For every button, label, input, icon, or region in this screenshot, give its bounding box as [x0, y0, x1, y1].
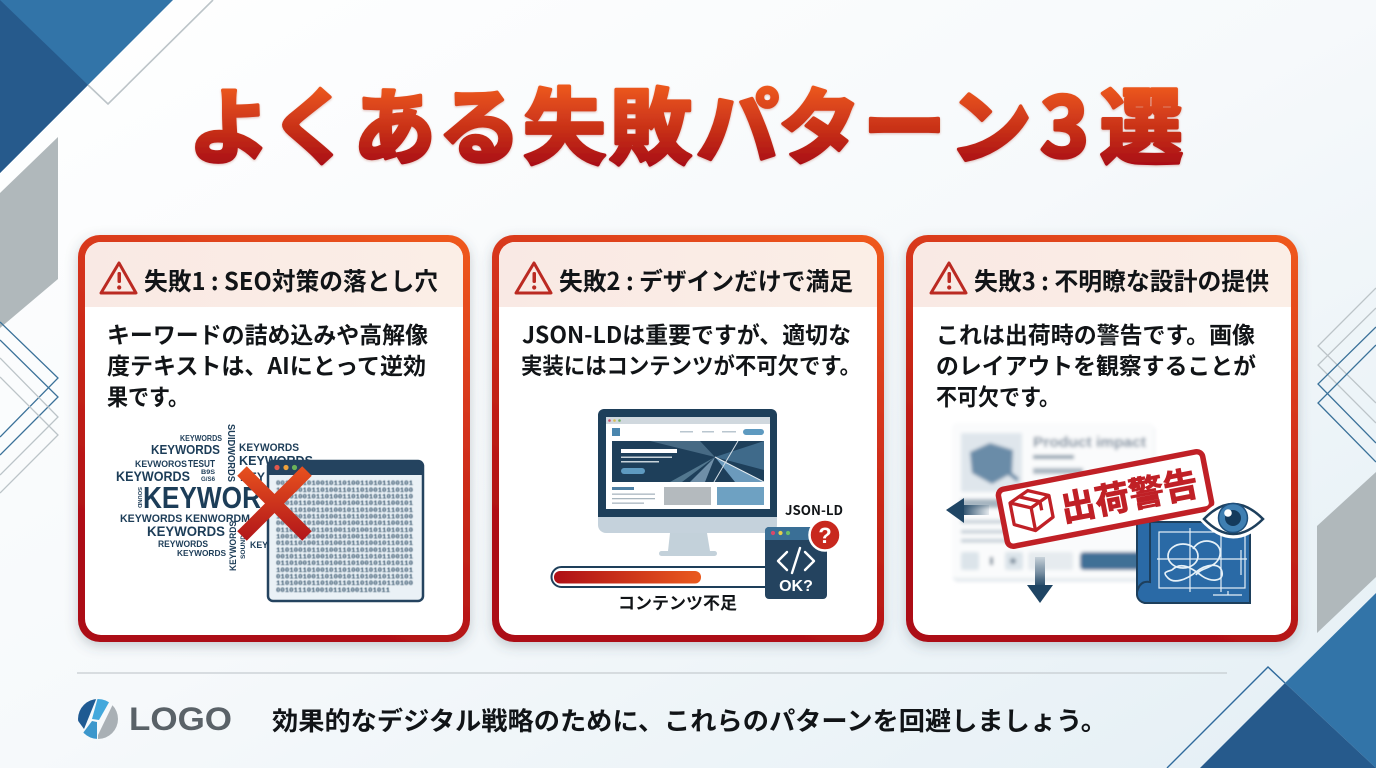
illustration: text-heavy browser window: 1101001011010011011010010110100	[276, 487, 413, 494]
illustration: keyword cloud: KEYWORDS	[239, 442, 299, 454]
illustration: text-heavy browser window: 0010111010010110100110101100101	[276, 554, 413, 560]
heading 1: 失敗1 : SEO対策の落とし穴	[144, 263, 438, 298]
panel: failure 2	[492, 235, 884, 642]
illustration: keyword cloud: KEYWORDS	[147, 524, 225, 539]
illustration: keyword cloud: SOUND	[136, 487, 142, 508]
body text 3	[936, 316, 1256, 412]
illustration: keyword cloud: KEYWORDS	[228, 521, 238, 571]
body text 2	[521, 316, 861, 381]
illustration: keyword cloud: KEYWORDS	[151, 442, 220, 457]
card frame 3	[906, 235, 1298, 642]
illustration: keyword cloud: KEYWOR	[143, 481, 261, 515]
title: よくある失敗パターン3選	[188, 61, 1183, 181]
illustration: keyword cloud: SOUND	[241, 534, 247, 559]
body text 3: のレイアウトを観察することが	[936, 347, 1256, 381]
illustration: text-heavy browser window: 1001011010010110100110101100101	[276, 534, 413, 540]
illustration: keyword cloud: KEYWORDS	[116, 468, 190, 484]
body text 2: 実装にはコンテンツが不可欠です。	[521, 349, 861, 381]
logo wordmark: LOGO	[129, 701, 232, 737]
heading 2: 失敗2 : デザインだけで満足	[559, 263, 853, 298]
label: JSON-LD: JSON-LD	[785, 499, 843, 519]
icon: warning triangle 2	[516, 263, 551, 293]
illustration: text-heavy browser window: 1101001011010011011010010110100	[276, 580, 413, 587]
illustration: text-heavy browser window: 1001011010010110100110101100101	[276, 500, 413, 507]
illustration: text-heavy browser window: 1101001011010011011010010110100	[276, 514, 413, 520]
illustration: keyword cloud: KEYWORDS	[177, 548, 226, 558]
body text 3: これは出荷時の警告です。画像	[936, 316, 1255, 350]
icon: blueprint	[1137, 514, 1250, 603]
footer message: 効果的なデジタル戦略のために、これらのパターンを回避しましょう。	[272, 701, 1107, 738]
icon: red cross	[242, 471, 307, 536]
illustration: keyword cloud: KEVWOROS	[135, 459, 187, 469]
logo	[78, 699, 230, 739]
stamp: shipping warning	[997, 451, 1213, 547]
body text 3: 不可欠です。	[936, 378, 1060, 412]
illustration: text-heavy browser window: 0110100101101001101001011010110	[276, 494, 413, 500]
arrow: left	[946, 498, 989, 523]
card frame 2	[492, 235, 884, 642]
body text 1: キーワードの詰め込みや高解像	[107, 316, 428, 350]
illustration: keyword cloud: G/S6	[201, 477, 216, 483]
decoration: top-left geometric shapes	[0, 0, 213, 493]
icon: warning triangle 3	[931, 263, 966, 293]
illustration: text-heavy browser window	[268, 461, 423, 601]
illustration: keyword cloud: B9S	[201, 470, 215, 476]
illustration: blurred product page: Product impact	[1033, 434, 1146, 451]
illustration: text-heavy browser window: 0101101001101001011010010110101	[276, 540, 413, 547]
icon: eye	[1202, 502, 1265, 536]
body text 1	[107, 316, 428, 412]
illustration: text-heavy browser window: 0110100101101001101001011010110	[276, 527, 413, 534]
divider	[77, 672, 1227, 674]
illustration: text-heavy browser window: 0010111010010110100110101100101	[276, 520, 413, 527]
arrow: down	[1027, 557, 1053, 603]
illustration: desktop monitor	[598, 409, 777, 556]
illustration: text-heavy browser window: 0101101001101001011010010110101	[276, 507, 413, 514]
label: content shortage: コンテンツ不足	[618, 589, 737, 614]
panel: failure 1	[78, 235, 470, 642]
heading 3: 失敗3 : 不明瞭な設計の提供	[974, 263, 1269, 298]
illustration: text-heavy browser window: 0010111010010110100110101100101	[276, 480, 413, 487]
icon: code window with question badge: OK?	[779, 578, 813, 595]
illustration: keyword cloud: TESUT	[188, 459, 215, 470]
icon: warning triangle 1	[101, 263, 136, 293]
decoration: right geometric shapes	[1167, 288, 1376, 768]
illustration: text-heavy browser window: 1101001011010011011010010110100	[276, 547, 413, 554]
body text 2: JSON-LDは重要ですが、適切な	[522, 316, 851, 350]
illustration: keyword cloud: KEY	[240, 470, 265, 484]
illustration: keyword cloud: KEYWORDS	[239, 453, 313, 468]
illustration: keyword cloud: SUIDWORDS	[225, 424, 236, 482]
card frame 1	[78, 235, 470, 642]
icon: code window with question badge: ?	[818, 523, 832, 548]
icon: logo mark	[78, 699, 118, 739]
illustration: keyword cloud	[116, 424, 313, 571]
body text 1: 度テキストは、AIにとって逆効	[107, 347, 426, 381]
illustration: text-heavy browser window: 1001011010010110100110101100101	[276, 567, 413, 574]
illustration: keyword cloud: KEYWORDS KENWORDM	[120, 513, 250, 525]
panel: failure 3	[906, 235, 1298, 642]
illustration: keyword cloud: REYWORDS	[158, 539, 208, 549]
body text 1: 果です。	[107, 378, 189, 412]
illustration: text-heavy browser window: 0101101001101001011010010110101	[276, 574, 413, 580]
illustration: keyword cloud: KEYWORDS	[180, 434, 223, 443]
illustration: text-heavy browser window: 0110100101101001101001011010110	[276, 560, 413, 567]
stamp text: 出荷警告	[1056, 456, 1202, 532]
illustration: text-heavy browser window: 00101110100101101001101011	[276, 587, 390, 594]
icon: code window with question badge	[765, 520, 840, 599]
icon: box in stamp	[1008, 487, 1055, 534]
progress bar: content shortage	[552, 567, 788, 587]
illustration: keyword cloud: KEY	[250, 540, 268, 550]
illustration: blurred product page	[952, 423, 1155, 582]
